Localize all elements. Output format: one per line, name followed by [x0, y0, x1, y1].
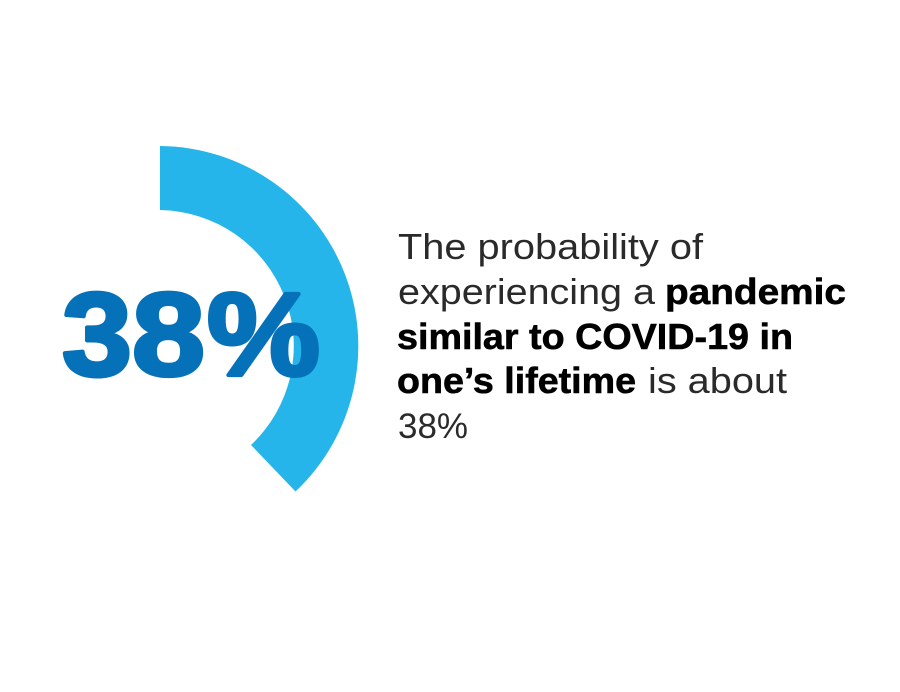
- description text block: pandemic: [665, 271, 846, 312]
- ring segment: 38 percent arc: [160, 146, 358, 492]
- description text block: experiencing a: [398, 271, 656, 312]
- description text block: is about: [648, 360, 787, 401]
- big number: 38%: 8: [132, 269, 205, 401]
- description text block: [397, 226, 846, 446]
- big number: 38%: 3: [62, 269, 132, 401]
- description text block: one’s lifetime: [397, 360, 636, 401]
- description text block: The probability of: [398, 226, 704, 267]
- description text block: 38%: [398, 407, 468, 446]
- big number: 38%: %: [207, 269, 320, 401]
- description text block: similar to COVID-19 in: [397, 316, 793, 357]
- big number: 38%: [62, 269, 320, 401]
